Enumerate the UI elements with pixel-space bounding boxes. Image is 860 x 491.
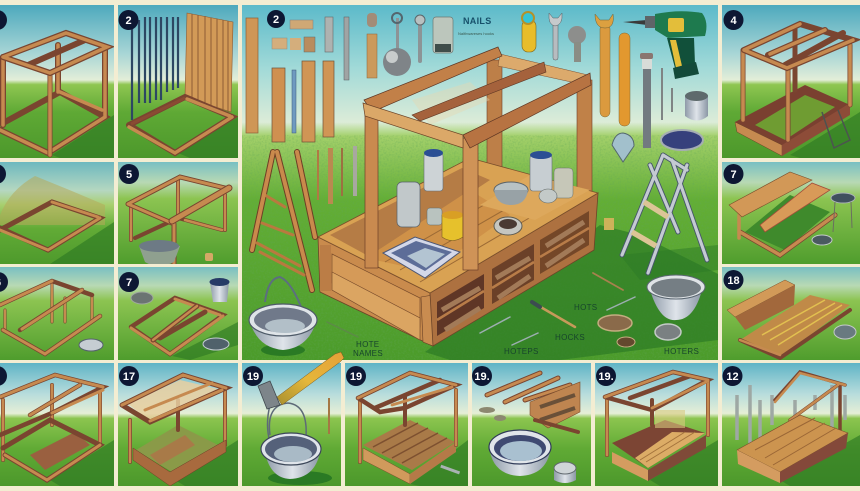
dish — [812, 235, 832, 245]
number badge 4 — [724, 10, 744, 30]
panel: bottom step 19 exploded parts — [472, 363, 591, 486]
loose tools on grass — [327, 273, 635, 345]
number badge partial — [0, 366, 7, 386]
panel: bottom step 19 bucket — [242, 363, 341, 486]
label: hoteps: HOTEPS — [504, 347, 539, 356]
poles — [132, 17, 178, 120]
pot — [210, 278, 230, 302]
number badge 7 right — [724, 164, 744, 184]
number badge 12: 12 — [726, 371, 739, 383]
bench right face with cubbies — [430, 193, 598, 346]
panel: step 5 frame with crossbar — [118, 162, 238, 264]
number badge 19 first: 19 — [247, 371, 259, 383]
number badge 19 third — [472, 366, 492, 386]
bucket — [139, 246, 180, 266]
icon: shuttle tool — [612, 133, 634, 162]
number badge 19 first — [243, 366, 263, 386]
number badge 5 — [119, 164, 139, 184]
icon: hammer — [258, 352, 344, 409]
label: hote names: NAMES — [353, 349, 383, 358]
icon: spanner rod — [415, 15, 425, 63]
bench top frame beams — [363, 47, 591, 148]
panel: step 3 base with sawdust — [0, 162, 114, 264]
right bucket — [647, 275, 705, 320]
stool pot — [831, 193, 855, 232]
label: hocks: HOCKS — [555, 333, 585, 342]
icon: metal cup — [685, 91, 708, 120]
number badge main 2 — [267, 10, 285, 28]
label: hots: HOTS — [574, 303, 597, 312]
front bench posts — [365, 106, 478, 270]
icon: ladle — [383, 13, 411, 76]
icon: yellow tool — [522, 12, 536, 52]
label: hoters: HOTERS — [664, 347, 699, 356]
panel: step 7 slats and pots — [118, 267, 238, 360]
number badge 17: 17 — [123, 371, 135, 383]
label: hote names: HOTE — [356, 340, 379, 349]
pan — [79, 339, 103, 351]
icon: grey bulb — [568, 26, 586, 62]
base frame — [129, 97, 232, 153]
metal tray — [383, 237, 460, 278]
icon: orange bar — [619, 33, 630, 126]
number badge 18 — [724, 270, 744, 290]
dish — [834, 325, 856, 339]
number badge 5: 5 — [126, 169, 132, 181]
rear bench posts — [412, 54, 592, 198]
number badge 3 — [0, 164, 6, 184]
number badge 6 — [0, 272, 8, 292]
number badge 19 fourth: 19. — [598, 371, 614, 383]
icon: dish — [661, 130, 703, 150]
panel: step 7 planks on frame — [722, 162, 860, 264]
number badge 7 — [119, 272, 139, 292]
left bucket — [249, 277, 317, 356]
number badge 19 third: 19. — [474, 371, 490, 383]
number badge 18: 18 — [727, 275, 740, 287]
number badge 19 second: 19 — [350, 371, 362, 383]
bench left face with drawers — [318, 237, 433, 346]
small caption under nails: Nalthwareses hooks — [458, 31, 494, 36]
panel: bottom step 19 decked frame — [595, 363, 718, 486]
panel: bottom step 19 slatted frame — [345, 363, 468, 486]
dish right — [203, 338, 229, 350]
icon: long bolt — [640, 53, 653, 148]
panel: main workbench scene — [242, 5, 718, 360]
panel: step 4 frame with red base — [722, 5, 860, 158]
panel: step 6 low frame — [0, 267, 114, 360]
upright planks — [185, 13, 233, 112]
right metal ladder — [622, 155, 707, 273]
number badge 1 — [0, 10, 7, 30]
number badge 12 — [722, 366, 742, 386]
small rings and dishes on grass — [598, 218, 681, 347]
number badge 19 second — [346, 366, 366, 386]
number badge 17 — [119, 366, 139, 386]
icon: cordless drill — [623, 11, 706, 79]
icon: wrench — [549, 13, 562, 60]
panel: bottom step A — [0, 363, 114, 486]
number badge 2 — [118, 10, 138, 30]
left wooden ladder — [252, 152, 315, 290]
basin — [489, 430, 551, 476]
number badge 2: 2 — [125, 15, 132, 27]
bench top surface — [318, 158, 598, 293]
number badge 4: 4 — [730, 15, 737, 27]
icon: orange wrench — [595, 14, 613, 117]
jars and bowls on bench — [397, 149, 573, 240]
icon: jar of nails — [433, 17, 453, 53]
panel: step 1 open frame — [0, 5, 114, 158]
leaning ladder — [822, 110, 850, 148]
panel: step 2 poles and planks — [118, 5, 238, 158]
panel: bottom step 17 — [118, 363, 238, 486]
number badge 7 right: 7 — [730, 169, 737, 181]
panel: bottom step 12 finished deck — [722, 363, 860, 486]
number badge 7: 7 — [126, 277, 132, 289]
bench shadow — [425, 225, 720, 360]
dish left — [131, 292, 153, 304]
icon: thin screws — [662, 68, 672, 120]
number badge main 2: 2 — [273, 14, 279, 26]
panel: step 18 deck planks — [722, 267, 860, 360]
number badge 19 fourth — [596, 366, 616, 386]
small cup — [554, 462, 576, 483]
heading: nails label: NAILS — [463, 16, 492, 26]
tools: planks and rods — [246, 13, 377, 204]
